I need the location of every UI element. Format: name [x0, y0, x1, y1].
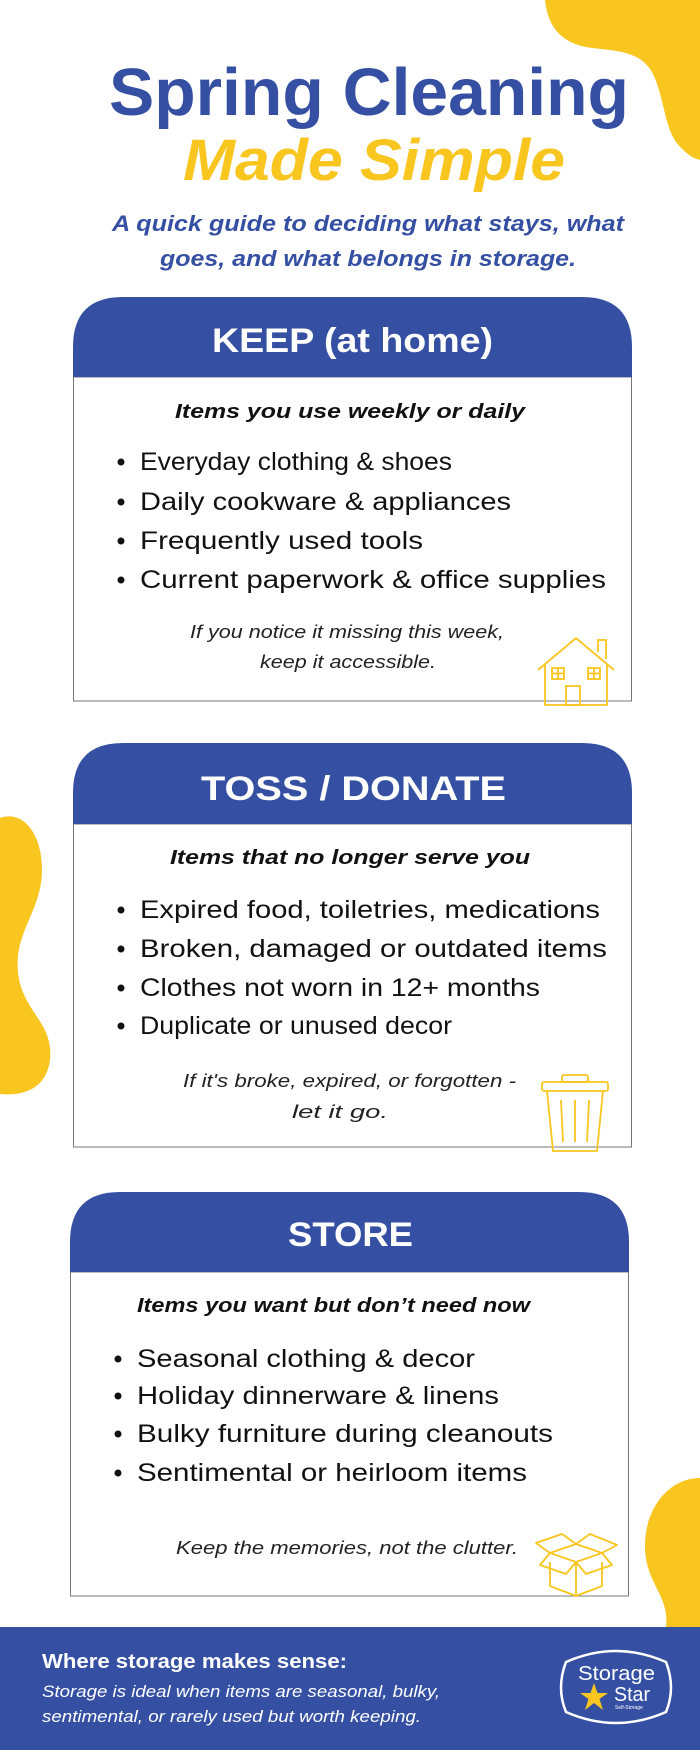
bullet list [114, 1345, 553, 1487]
note: If you notice it missing this week, [190, 622, 504, 642]
subheading: Items you want but don’t need now [137, 1295, 532, 1317]
panel: keep: KEEP (at home) [212, 322, 493, 360]
decorative blob: left [0, 816, 50, 1094]
bullet list: Duplicate or unused decor [140, 1012, 452, 1040]
intro text: goes, and what belongs in storage. [159, 246, 576, 271]
note: let it go. [292, 1102, 388, 1122]
bullet list: Current paperwork & office supplies [140, 566, 606, 594]
icon: trash can [542, 1075, 608, 1151]
decorative blob: bottom right [645, 1478, 700, 1627]
footer text: sentimental, or rarely used but worth keeping. [42, 1707, 421, 1726]
note: If it's broke, expired, or forgotten - [183, 1071, 516, 1091]
panel: toss / donate: TOSS / DONATE [201, 770, 506, 808]
footer heading: Where storage makes sense: [42, 1651, 347, 1673]
bullet list: Expired food, toiletries, medications [140, 896, 600, 924]
intro text [111, 211, 626, 271]
logo: Storage Star: Star [614, 1684, 650, 1706]
bullet list: Bulky furniture during cleanouts [137, 1420, 553, 1448]
subheading: Items you use weekly or daily [175, 401, 526, 423]
heading: store [70, 1192, 629, 1272]
note: keep it accessible. [260, 652, 436, 672]
bullet list: Seasonal clothing & decor [137, 1345, 475, 1373]
note [190, 622, 504, 672]
panel: keep [73, 297, 632, 705]
footer [0, 1627, 700, 1750]
bullet list: Clothes not worn in 12+ months [140, 974, 540, 1002]
logo: Storage Star: Self-Storage [615, 1705, 643, 1711]
panel: store: STORE [288, 1216, 413, 1254]
bullet list [118, 896, 607, 1040]
icon: open box [536, 1534, 617, 1596]
bullet list: Holiday dinnerware & linens [137, 1382, 499, 1410]
bullet list: Broken, damaged or outdated items [140, 935, 607, 963]
bullet list: Daily cookware & appliances [140, 488, 511, 516]
logo: Storage Star: Storage [578, 1663, 655, 1685]
decorative blob: top right [545, 0, 700, 160]
title [109, 55, 629, 193]
panel: toss / donate [73, 743, 632, 1151]
bullet list [118, 448, 606, 594]
heading: toss [73, 743, 632, 824]
bullet list: Sentimental or heirloom items [137, 1459, 527, 1487]
footer text [42, 1682, 440, 1726]
subtitle script: Made Simple [183, 128, 565, 193]
note: Keep the memories, not the clutter. [176, 1538, 518, 1558]
title: Spring Cleaning [109, 55, 629, 130]
subheading: Items that no longer serve you [170, 847, 530, 869]
footer text: Storage is ideal when items are seasonal, bulky, [42, 1682, 440, 1701]
icon: house [538, 638, 614, 705]
intro text: A quick guide to deciding what stays, what [111, 211, 626, 236]
bullet list: Everyday clothing & shoes [140, 448, 452, 476]
bullet list: Frequently used tools [140, 527, 423, 555]
logo: Storage Star [561, 1651, 671, 1723]
panel: store [70, 1192, 629, 1596]
heading: keep [73, 297, 632, 377]
note [183, 1071, 516, 1122]
